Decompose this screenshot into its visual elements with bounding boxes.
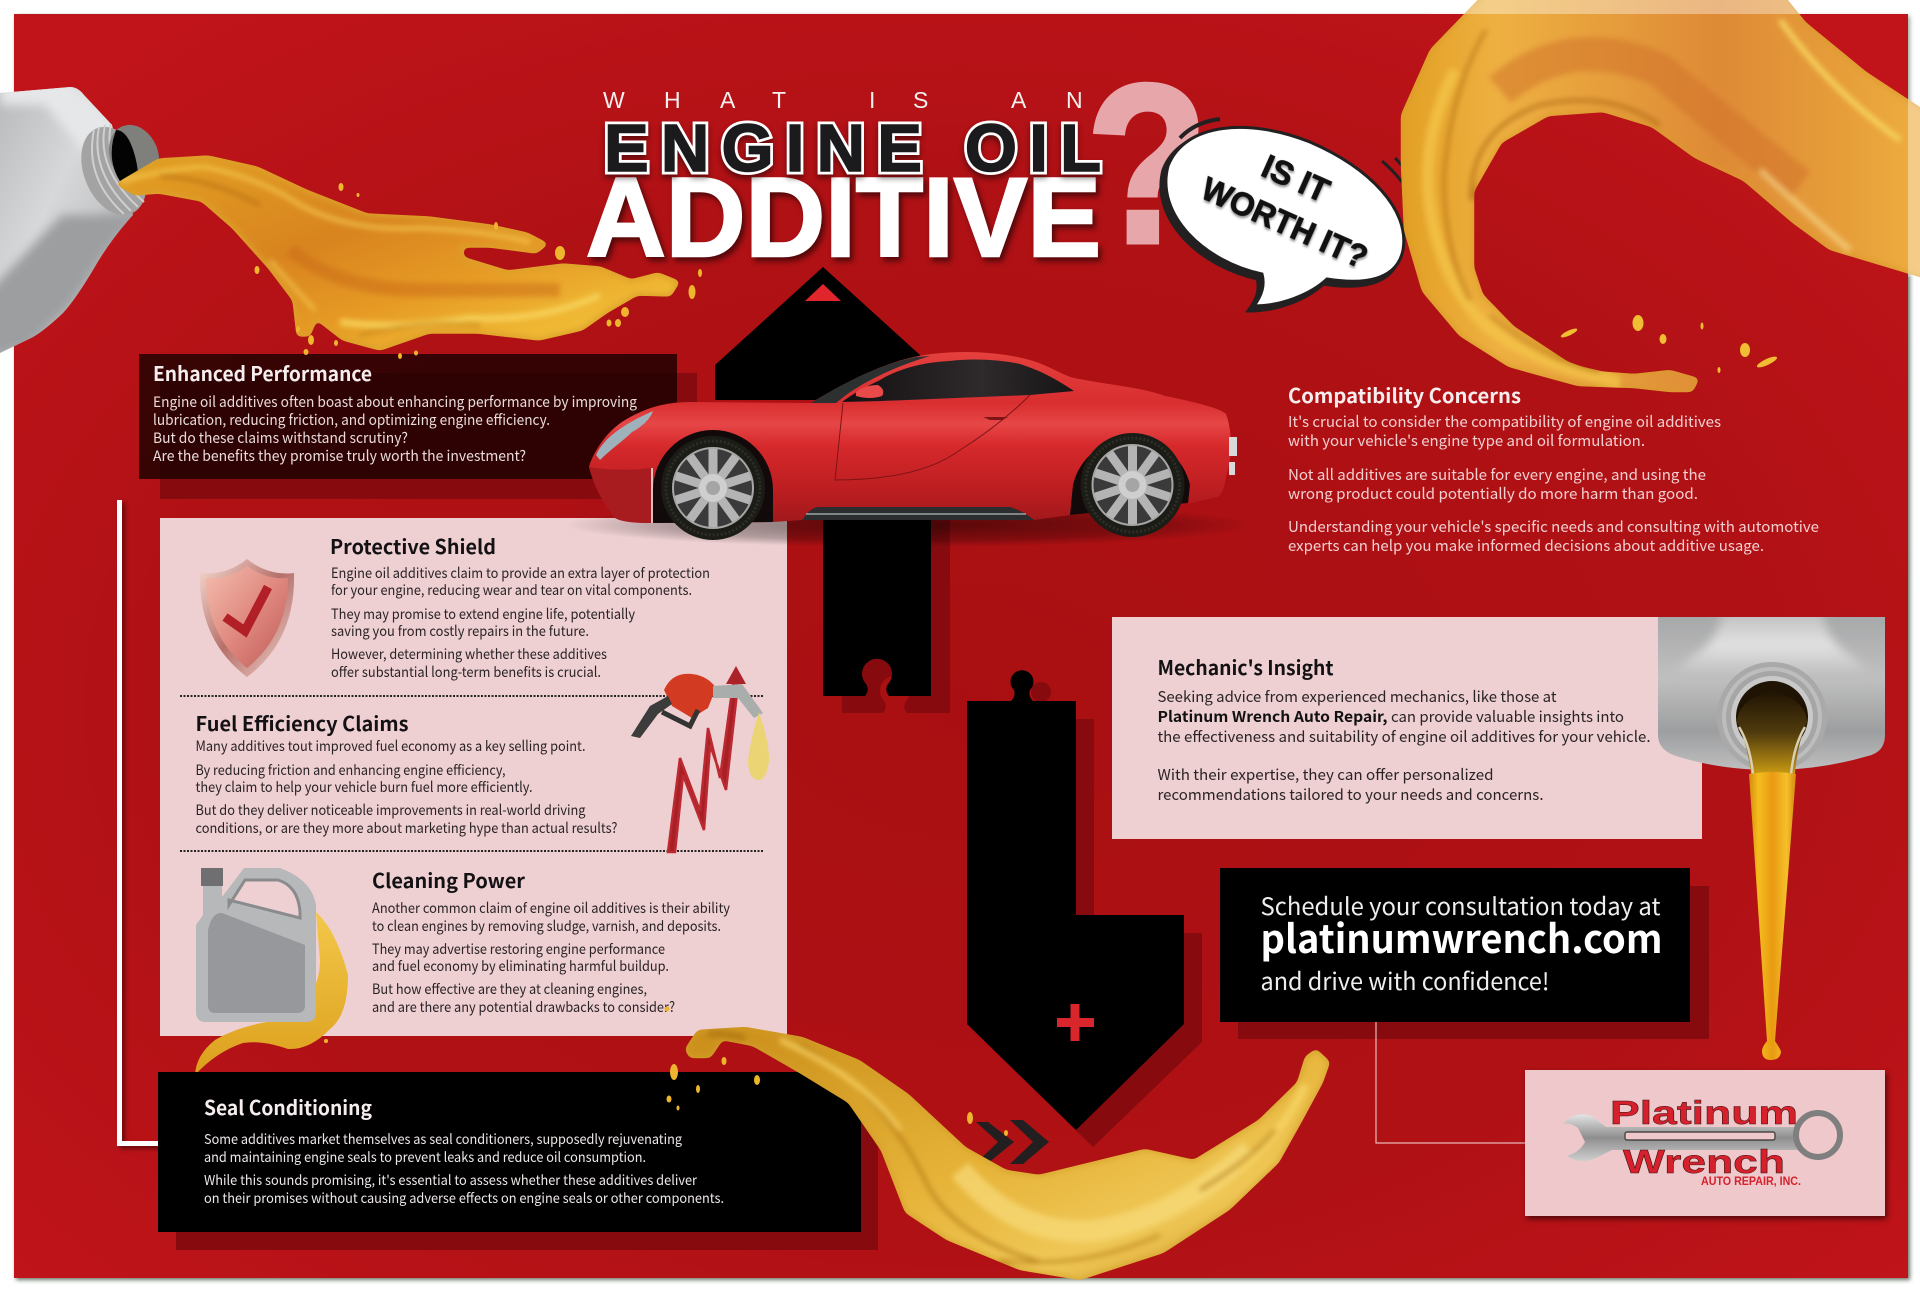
text block: compatibility concerns: with your vehicle's engine type and oil formulation. — [1288, 430, 1645, 451]
text block: cleaning power: and are there any potential drawbacks to consider? — [372, 997, 675, 1017]
text block: mechanic's insight: recommendations tailored to your needs and concerns. — [1158, 784, 1544, 805]
text block: mechanic's insight: the effectiveness and suitability of engine oil additives for your vehicle. — [1158, 726, 1650, 747]
oil droplets: top left — [254, 183, 702, 359]
text block: protective shield: for your engine, reducing wear and tear on vital components. — [331, 580, 692, 600]
engine oil fill: ENGINE OIL — [604, 111, 1101, 186]
text block: compatibility concerns — [1288, 380, 1819, 556]
text block: cleaning power: Another common claim of engine oil additives is their ability — [372, 898, 731, 918]
bubble text: worth it: WORTH IT? — [1196, 170, 1373, 276]
text block: fuel efficiency: they claim to help your vehicle burn fuel more efficiently. — [196, 777, 532, 797]
panel: enhanced performance — [139, 354, 677, 479]
shadow: CTA — [1238, 886, 1709, 1039]
page margin veil over oil — [1430, 0, 1920, 277]
text: confidence: and drive with confidence! — [1260, 962, 1550, 997]
text block: compatibility concerns: experts can help you make informed decisions about additive usage. — [1288, 535, 1764, 556]
title: what is an: WHAT IS AN — [603, 87, 1083, 113]
shadow: up arrow stem — [842, 640, 950, 713]
text block: protective shield: They may promise to extend engine life, potentially — [331, 604, 636, 624]
text block: enhanced performance body: lubrication, reducing friction, and optimizing engine efficiency. — [153, 409, 550, 430]
oil droplets: top right — [1560, 315, 1778, 373]
text block: mechanic's insight: With their expertise, they can offer personalized — [1158, 764, 1494, 785]
text block: enhanced performance body: Engine oil additives often boast about enhancing performance by improving — [153, 391, 637, 412]
bracket line — [120, 500, 160, 1144]
text block: mechanic's insight — [1158, 686, 1650, 805]
text block: fuel efficiency: By reducing friction and enhancing engine efficiency, — [196, 760, 506, 780]
text block: seal conditioning: While this sounds promising, it's essential to assess whether these additives deliver — [204, 1169, 698, 1189]
text block: cleaning power: But how effective are they at cleaning engines, — [372, 979, 647, 999]
text block: fuel efficiency — [196, 736, 618, 838]
text block: fuel efficiency: But do they deliver noticeable improvements in real-world driving — [196, 800, 586, 820]
panel: seal conditioning — [158, 1072, 861, 1232]
text: schedule: Schedule your consultation today at — [1260, 887, 1660, 922]
arrow: up — [715, 267, 931, 696]
heading: enhanced performance: Enhanced Performance — [153, 358, 372, 387]
shadow: knob — [1031, 682, 1051, 702]
text: website: platinumwrench.com — [1260, 909, 1662, 965]
icon: chevrons — [976, 1120, 1049, 1164]
text block: protective shield: Engine oil additives claim to provide an extra layer of protection — [331, 563, 710, 583]
text block: mechanic's insight: can provide valuable insights into — [1391, 706, 1624, 727]
icon: wrench — [1563, 1113, 1840, 1161]
text block: seal conditioning: on their promises without causing adverse effects on engine seals or other components. — [204, 1187, 724, 1207]
text block: compatibility concerns: It's crucial to consider the compatibility of engine oil additives — [1288, 411, 1721, 432]
text block: seal conditioning — [204, 1128, 724, 1207]
shadow: up arrow side — [931, 520, 950, 645]
panel: call to action — [1220, 868, 1690, 1022]
illustration: red sports car — [589, 352, 1237, 540]
icon: oil jug with splash — [195, 868, 348, 1075]
icon: right oil bottle pouring — [1658, 610, 1885, 1060]
text block: cleaning power: They may advertise restoring engine performance — [372, 939, 665, 959]
oil splash: top left — [118, 157, 678, 349]
shadow: seal panel — [176, 1090, 878, 1250]
engine oil outline: ENGINE OIL — [604, 111, 1101, 186]
text block: compatibility concerns: Not all additives are suitable for every engine, and using the — [1288, 464, 1706, 485]
heading: protective shield: Protective Shield — [330, 531, 496, 560]
icon: left oil bottle — [0, 87, 159, 353]
text block: protective shield: However, determining whether these additives — [331, 644, 607, 664]
text block: seal conditioning: and maintaining engine seals to prevent leaks and reduce oil consumption. — [204, 1146, 646, 1166]
text block: enhanced performance body: But do these claims withstand scrutiny? — [153, 427, 408, 448]
text block: protective shield — [331, 563, 710, 682]
divider: bottom — [180, 850, 763, 852]
oil splash: top right — [1402, 0, 1920, 391]
heading: compatibility concerns: Compatibility Concerns — [1288, 380, 1521, 409]
text block: cleaning power: and fuel economy by eliminating harmful buildup. — [372, 956, 669, 976]
text block: enhanced performance body — [153, 391, 637, 466]
text: Platinum: Platinum — [1610, 1094, 1798, 1131]
panel: logo — [1525, 1070, 1885, 1216]
speech bubble — [1162, 119, 1421, 310]
icon: plus — [1057, 1004, 1094, 1041]
connector line — [1376, 1022, 1525, 1143]
text block: cleaning power: to clean engines by removing sludge, varnish, and deposits. — [372, 916, 721, 936]
icon: fuel pump and rising arrow — [631, 666, 769, 852]
text block: mechanic's insight: Platinum Wrench Auto Repair, — [1158, 706, 1388, 727]
heading: cleaning power: Cleaning Power — [372, 865, 525, 894]
bubble text: is it: IS IT — [1256, 147, 1335, 210]
text block: compatibility concerns: Understanding your vehicle's specific needs and consulting with automotive — [1288, 516, 1819, 537]
shadow: enhanced performance panel — [160, 373, 697, 499]
panel: mechanic's insight — [1112, 617, 1702, 839]
car shadow — [565, 503, 1255, 547]
text block: enhanced performance body: Are the benefits they promise truly worth the investment? — [153, 445, 526, 466]
icon: shield — [200, 559, 294, 677]
title question mark: ? — [1086, 38, 1208, 291]
oil stream — [1749, 772, 1796, 1060]
panel: protective claims — [160, 518, 787, 1036]
text block: protective shield: saving you from costly repairs in the future. — [331, 621, 589, 641]
oil droplets: bottom — [324, 1006, 1008, 1136]
text: Wrench: Wrench — [1623, 1143, 1785, 1180]
icon: red triangle — [805, 284, 841, 301]
heading: seal conditioning: Seal Conditioning — [204, 1092, 372, 1121]
heading: mechanic's insight: Mechanic's Insight — [1158, 652, 1334, 681]
text block: compatibility concerns: wrong product could potentially do more harm than good. — [1288, 483, 1698, 504]
divider: top — [180, 695, 763, 697]
text block: fuel efficiency: conditions, or are they more about marketing hype than actual results? — [196, 818, 618, 838]
title: additive: ADDITIVE — [586, 155, 1101, 280]
text block: seal conditioning: Some additives market themselves as seal conditioners, supposedly rejuvenating — [204, 1128, 682, 1148]
arrow: down — [967, 670, 1184, 1130]
heading: fuel efficiency claims: Fuel Efficiency Claims — [196, 708, 409, 737]
shadow: down arrow — [985, 719, 1202, 1147]
text block: cleaning power — [372, 898, 731, 1017]
text block: mechanic's insight: Seeking advice from experienced mechanics, like those at — [1158, 686, 1557, 707]
text block: protective shield: offer substantial long-term benefits is crucial. — [331, 662, 601, 682]
title: engine oil — [604, 111, 1101, 186]
text: Auto Repair: AUTO REPAIR, INC. — [1701, 1174, 1801, 1188]
oil splash: bottom — [686, 1028, 1329, 1279]
text block: fuel efficiency: Many additives tout improved fuel economy as a key selling point. — [196, 736, 586, 756]
